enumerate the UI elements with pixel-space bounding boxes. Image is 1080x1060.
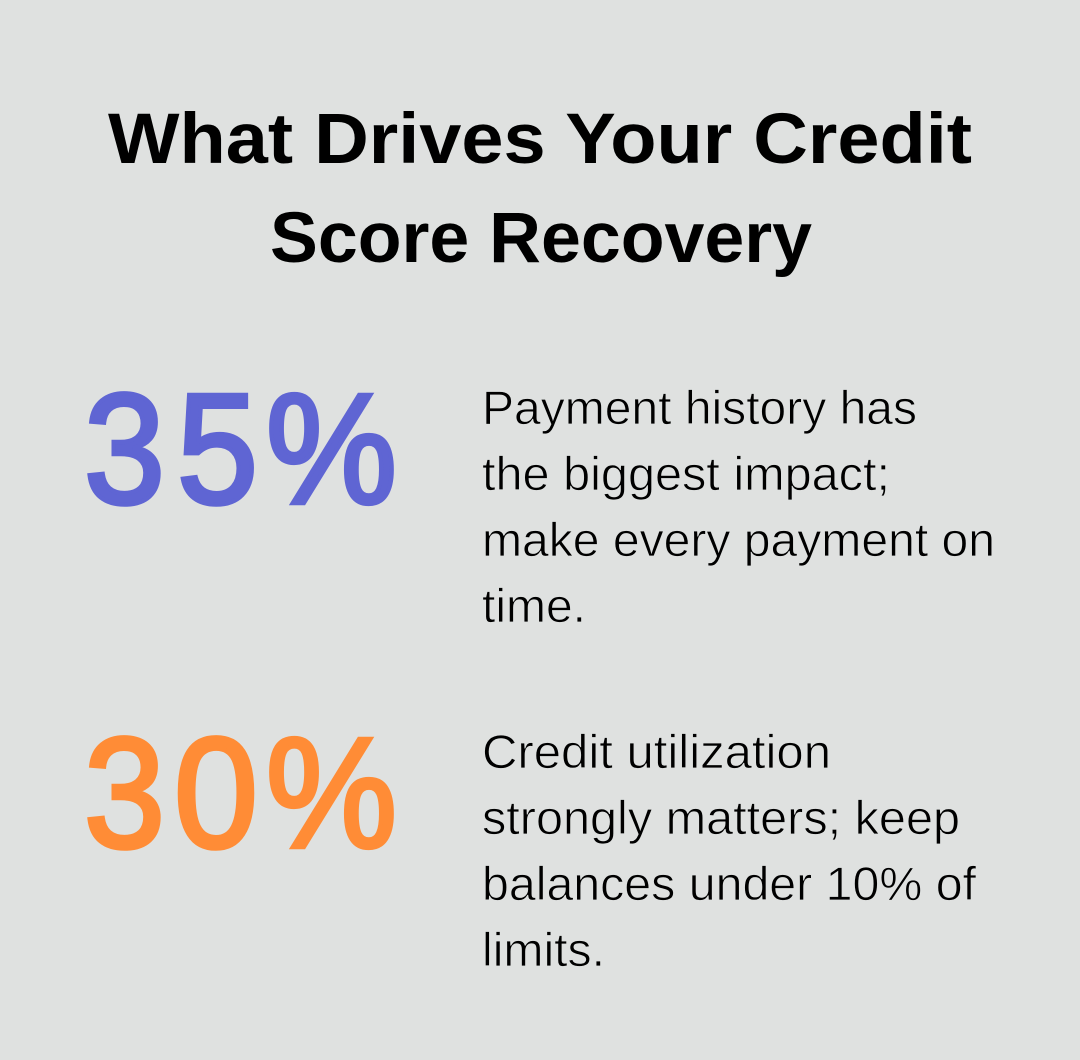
stat: 35%: 5 bbox=[177, 362, 258, 537]
text block: credit utilization description: limits. bbox=[482, 924, 605, 977]
stat: 30%: 3 bbox=[84, 706, 165, 881]
text block: credit utilization description: Credit utilization bbox=[482, 726, 831, 779]
title: What Drives Your Credit bbox=[108, 100, 972, 179]
text block: payment history description bbox=[482, 382, 995, 633]
text block: credit utilization description: balances under 10% of bbox=[482, 858, 977, 911]
stat: 30%: 0 bbox=[174, 706, 258, 881]
text block: payment history description: time. bbox=[482, 580, 586, 633]
text block: payment history description: Payment history has bbox=[482, 382, 917, 435]
text block: credit utilization description bbox=[482, 726, 977, 977]
text block: payment history description: make every payment on bbox=[482, 514, 995, 567]
stat: 35%: % bbox=[266, 362, 397, 537]
text block: credit utilization description: strongly matters; keep bbox=[482, 792, 960, 845]
title: Score Recovery bbox=[270, 199, 813, 278]
title bbox=[108, 100, 972, 278]
panel: payment history stat bbox=[84, 362, 995, 633]
stat: 35%: 3 bbox=[84, 362, 165, 537]
stat: 30%: % bbox=[266, 706, 397, 881]
panel: credit utilization stat bbox=[84, 706, 977, 977]
text block: payment history description: the biggest impact; bbox=[482, 448, 890, 501]
